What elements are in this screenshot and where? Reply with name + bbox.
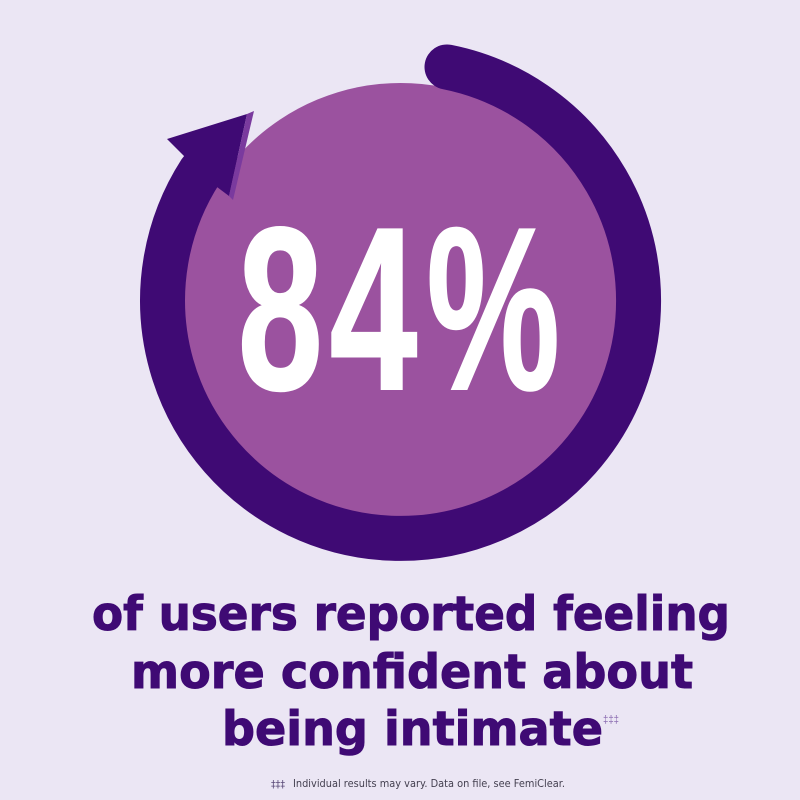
- headline: more confident about: [131, 645, 693, 700]
- headline: [92, 587, 730, 757]
- big number 84%: %: [426, 180, 560, 439]
- big number 84%: 8: [238, 179, 323, 439]
- headline: of users reported feeling: [92, 587, 730, 642]
- footnote: ‡‡‡: [271, 779, 285, 791]
- superscript marker: ‡‡‡: [603, 714, 619, 726]
- headline: being intimate: [222, 702, 603, 757]
- circular arrow: [163, 67, 639, 538]
- purple circle: [184, 83, 618, 517]
- footnote: Individual results may vary. Data on file, see FemiClear.: [293, 778, 565, 790]
- big number 84%: 4: [330, 180, 417, 439]
- big number 84%: [238, 179, 560, 439]
